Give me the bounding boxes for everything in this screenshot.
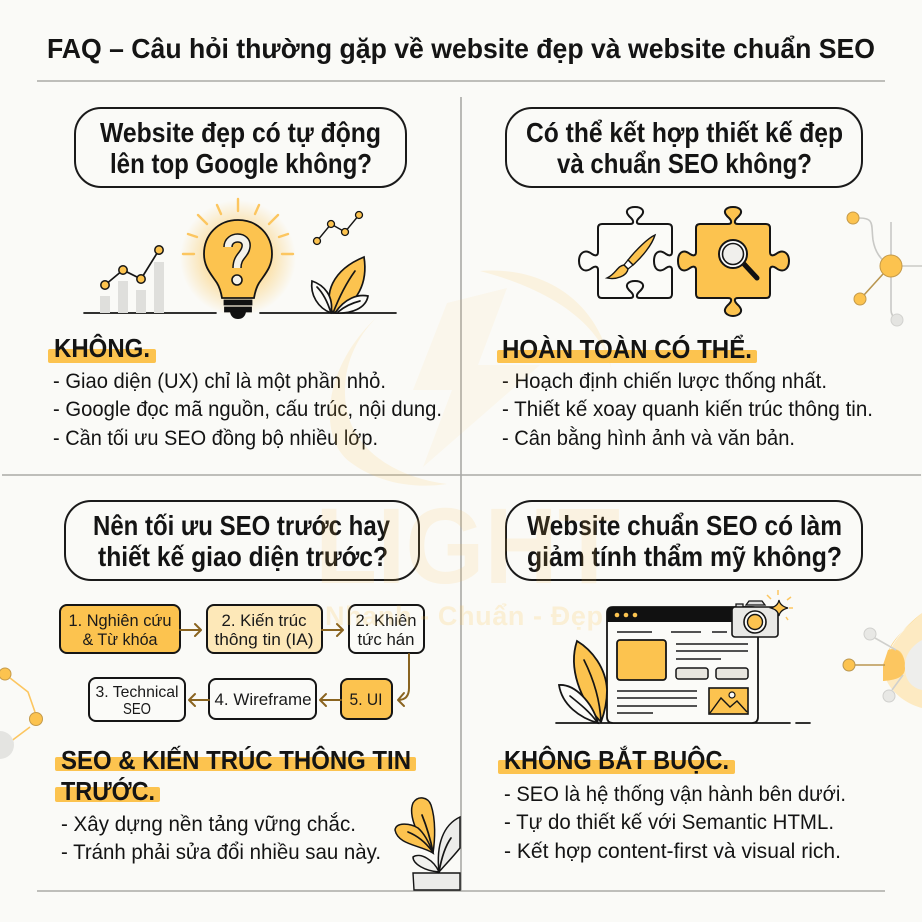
question box: Website đẹp có tự động (100, 117, 381, 148)
answer list: - Thiết kế xoay quanh kiến trúc thông tin. (502, 398, 873, 421)
answer list (504, 783, 846, 863)
decorative network right (843, 613, 922, 708)
arrow (189, 694, 209, 706)
answer heading: SEO & KIẾN TRÚC THÔNG TIN (61, 745, 411, 775)
step: research: & Từ khóa (82, 630, 158, 649)
step: research (60, 605, 180, 653)
question box: Website chuẩn SEO có làm (527, 510, 842, 541)
answer list: - Xây dựng nền tảng vững chắc. (61, 813, 356, 836)
step: technical SEO: SEO (123, 701, 151, 718)
answer list (502, 370, 873, 450)
answer list: - Hoạch định chiến lược thống nhất. (502, 370, 827, 393)
panel: bottom-left (0, 501, 460, 890)
answer list: - Cần tối ưu SEO đồng bộ nhiều lớp. (53, 427, 378, 450)
answer list: - Google đọc mã nguồn, cấu trúc, nội dung. (53, 398, 442, 421)
title: FAQ – Câu hỏi thường gặp về website đẹp và website chuẩn SEO (47, 33, 875, 64)
step: technical SEO (89, 678, 185, 721)
step: information architecture: 2. Kiến trúc (222, 611, 307, 630)
answer list: - Cân bằng hình ảnh và văn bản. (502, 427, 795, 450)
answer heading: HOÀN TOÀN CÓ THỂ. (502, 334, 752, 364)
step: UI (341, 679, 392, 719)
arrow (180, 624, 201, 636)
step: technical SEO: 3. Technical (96, 684, 178, 701)
watermark logo (315, 270, 620, 631)
decorative network right (847, 212, 922, 326)
answer heading (55, 745, 416, 806)
answer list (61, 813, 381, 864)
question box (65, 501, 419, 580)
question box (75, 108, 406, 187)
arrow (322, 624, 343, 636)
question box: lên top Google không? (110, 148, 372, 179)
icon: potted plant (395, 798, 460, 890)
answer list: - Kết hợp content-first và visual rich. (504, 840, 841, 863)
panel: bottom-right (498, 501, 922, 863)
answer list: - Tự do thiết kế với Semantic HTML. (504, 811, 834, 834)
step: wireframe (209, 679, 316, 719)
question box: thiết kế giao diện trước? (98, 541, 388, 572)
answer list: - Tránh phải sửa đổi nhiều sau này. (61, 841, 381, 864)
icon: browser window with camera (556, 590, 810, 723)
step: information architecture: thông tin (IA) (214, 630, 314, 649)
step: UI: 5. UI (350, 690, 382, 709)
question box (506, 501, 862, 580)
answer list: - Giao diện (UX) chỉ là một phần nhỏ. (53, 370, 386, 393)
answer list: - SEO là hệ thống vận hành bên dưới. (504, 783, 846, 806)
step: third box: 2. Khiên (356, 611, 416, 630)
arrow (320, 694, 341, 706)
step: research: 1. Nghiên cứu (68, 611, 172, 630)
question box: Có thể kết hợp thiết kế đẹp (526, 117, 843, 148)
answer heading: TRƯỚC. (61, 776, 155, 806)
answer list (53, 370, 442, 450)
flow chart (60, 605, 424, 721)
answer heading: KHÔNG BẮT BUỘC. (504, 745, 729, 775)
question box: và chuẩn SEO không? (557, 148, 812, 179)
question box: Nên tối ưu SEO trước hay (93, 510, 390, 541)
answer heading: KHÔNG. (54, 333, 150, 363)
arrow down (398, 654, 409, 706)
question box (506, 108, 862, 187)
panel: top-left (48, 108, 442, 450)
icon: puzzle pieces (579, 207, 789, 316)
step: third box (349, 605, 424, 653)
panel: top-right (497, 108, 922, 450)
decorative network left (0, 668, 42, 759)
step: information architecture (207, 605, 322, 653)
question box: giảm tính thẩm mỹ không? (527, 541, 842, 572)
step: third box: tức hán (358, 630, 414, 649)
watermark logo: LIGHT (315, 485, 620, 606)
step: wireframe: 4. Wireframe (214, 690, 312, 709)
icon: lightbulb illustration (84, 199, 396, 319)
watermark logo: Nhanh - Chuẩn - Đẹp (325, 601, 603, 631)
